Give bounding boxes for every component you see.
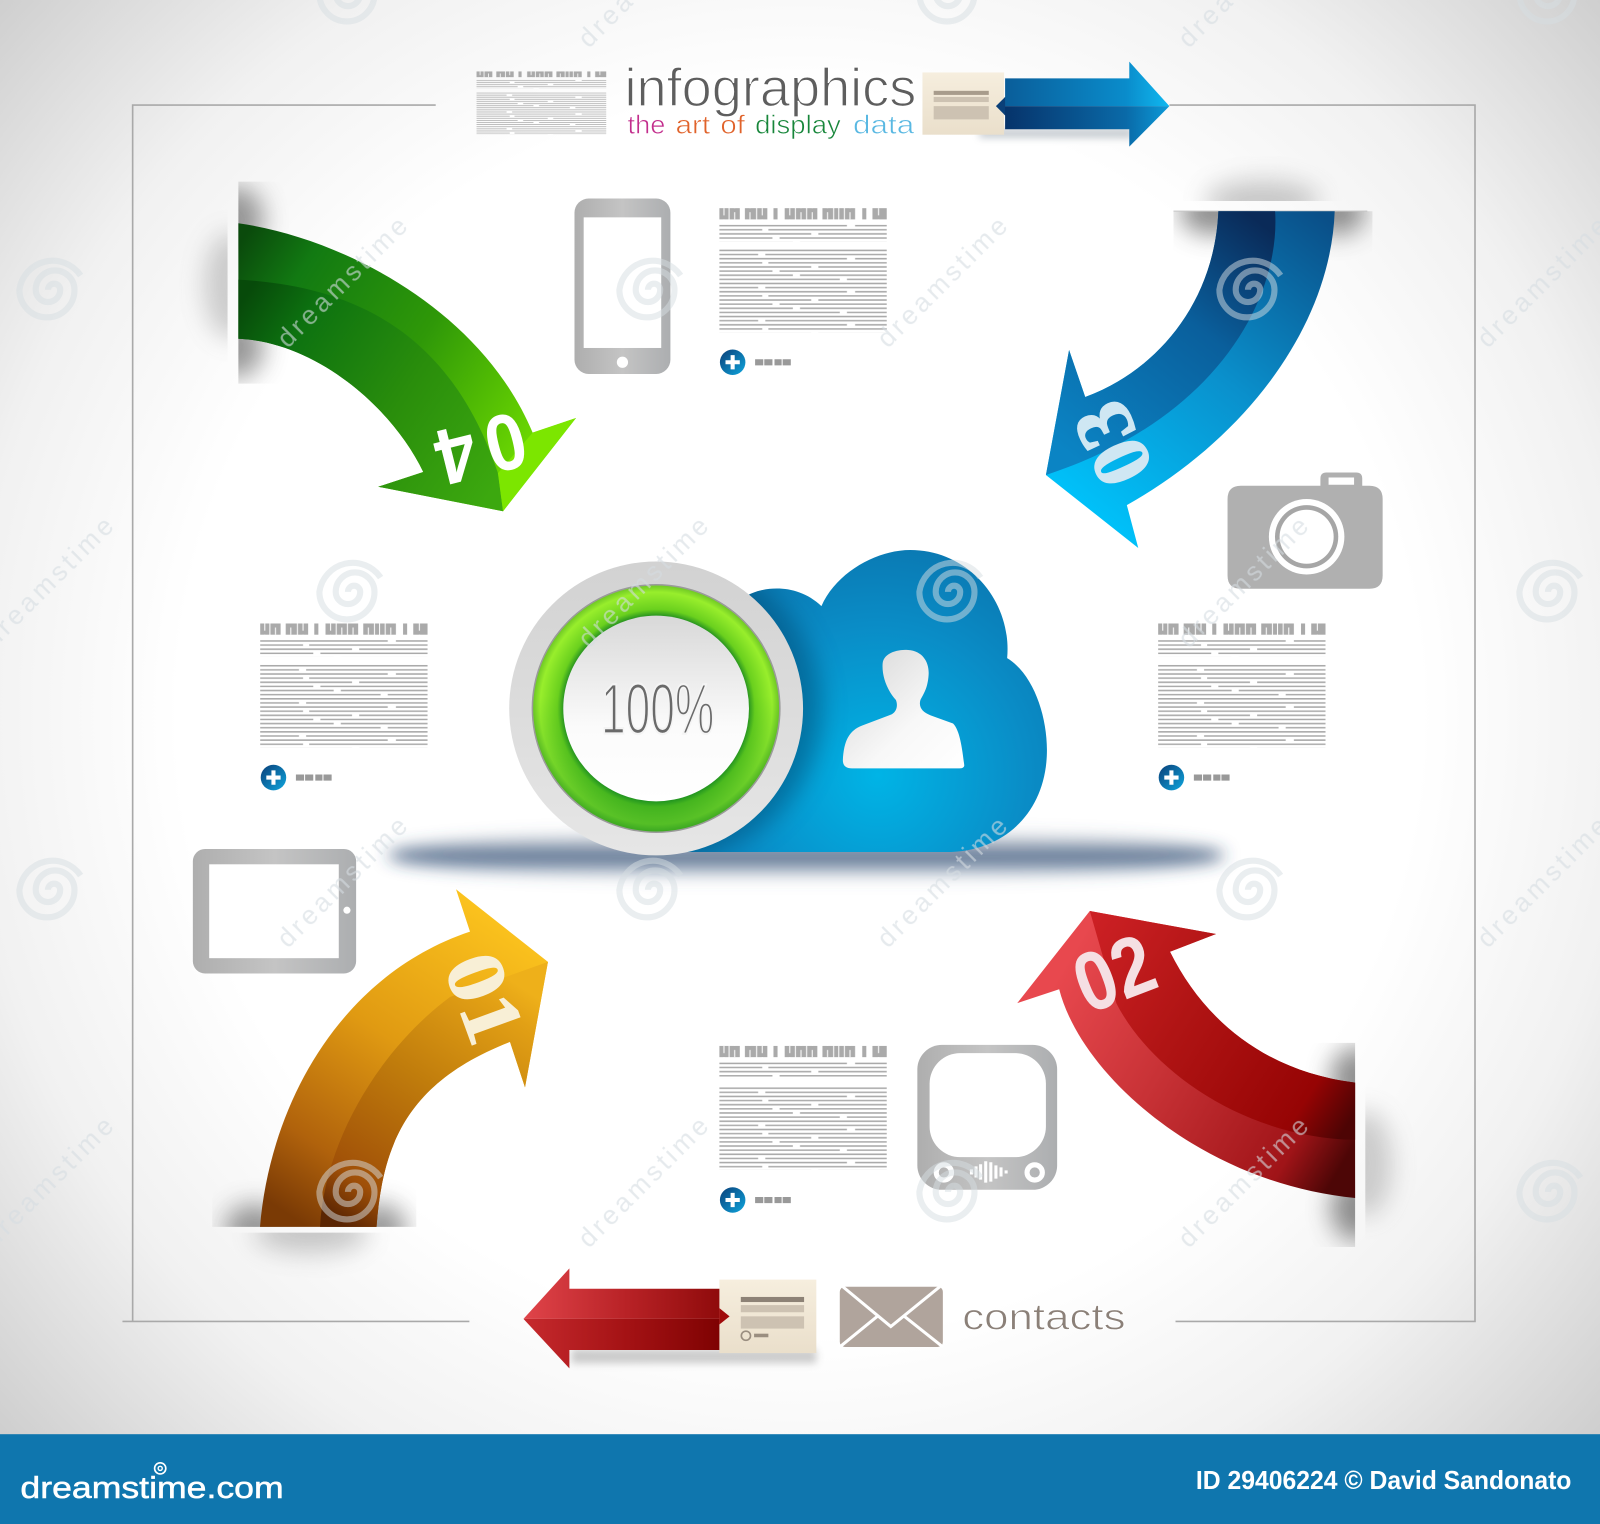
icon: camera (1228, 472, 1383, 589)
title: infographics: infographics (624, 58, 916, 118)
text block: left (260, 623, 428, 790)
watermark: dreamstime text: dreamstime (871, 811, 1013, 953)
subtitle: the art of display data: data (853, 112, 915, 140)
panel: arrow 02 slot shadows (1331, 1047, 1392, 1241)
gauge shadow on cloud (688, 588, 833, 852)
cloud (653, 550, 1047, 852)
header greeked text block (477, 71, 606, 135)
subtitle: the art of display data: art (676, 112, 710, 140)
header block (477, 58, 1169, 147)
read more button (1159, 765, 1230, 790)
icon: smartphone (574, 198, 670, 374)
watermark: dreamstime text: dreamstime (572, 1111, 714, 1253)
band logo spiral (155, 1463, 166, 1474)
watermark: dreamstime text: dreamstime (1172, 1111, 1314, 1253)
number 01: 01 (427, 941, 542, 1055)
watermark: dreamstime text: dreamstime (572, 511, 714, 653)
read more button (261, 765, 332, 790)
red arrow shadow (571, 1349, 816, 1363)
arrow: blue header arrow (996, 62, 1169, 147)
read more button (720, 350, 791, 375)
arrow: yellow 01 (260, 889, 548, 1227)
text: contacts: contacts (962, 1297, 1126, 1338)
arrow: red footer arrow (523, 1268, 731, 1368)
watermark: dreamstime text: dreamstime (271, 211, 413, 353)
band credit: ID 29406224 © David Sandonato (1196, 1467, 1571, 1495)
panel: arrow 03 slot shadows (1173, 181, 1367, 235)
footer block (523, 1268, 1126, 1368)
person icon (843, 650, 964, 768)
footer band (0, 1434, 1600, 1524)
subtitle: the art of display data (628, 112, 915, 140)
gauge (509, 562, 803, 855)
text block: right (1158, 623, 1326, 790)
band logo: dreamstime.com (20, 1471, 284, 1505)
header arrow shadow (980, 129, 1133, 138)
number 04: 04 (415, 394, 535, 505)
panel: arrow 04 slot shadows (204, 187, 263, 378)
number 03: 03 (1054, 388, 1171, 500)
subtitle: the art of display data: of (720, 112, 746, 140)
number 02: 02 (1061, 917, 1168, 1031)
icon: tablet (193, 849, 356, 973)
watermark: dreamstime text: dreamstime (271, 811, 413, 953)
subtitle: the art of display data: display (755, 112, 841, 140)
read more button (720, 1187, 791, 1213)
watermark: spirals (19, 0, 1581, 1219)
ground shadow (388, 831, 1224, 880)
header paper card (922, 72, 1005, 135)
icon: television (917, 1045, 1057, 1190)
text block: top (719, 208, 887, 375)
text block: bottom (719, 1046, 887, 1213)
value 100%: 100% (601, 670, 714, 750)
subtitle: the art of display data: the (628, 112, 665, 140)
icon: envelope (840, 1287, 943, 1347)
arrow: green 04 (238, 223, 576, 511)
panel: central cloud and gauge (388, 550, 1224, 880)
arrow: red 02 (1017, 911, 1355, 1198)
watermark: dreamstime text: dreamstime (1172, 511, 1314, 653)
arrow: blue 03 (1046, 211, 1335, 548)
panel: arrow 01 slot shadows (224, 1204, 406, 1253)
footer paper card (719, 1280, 816, 1353)
watermark: dreamstime text: dreamstime (871, 211, 1013, 353)
